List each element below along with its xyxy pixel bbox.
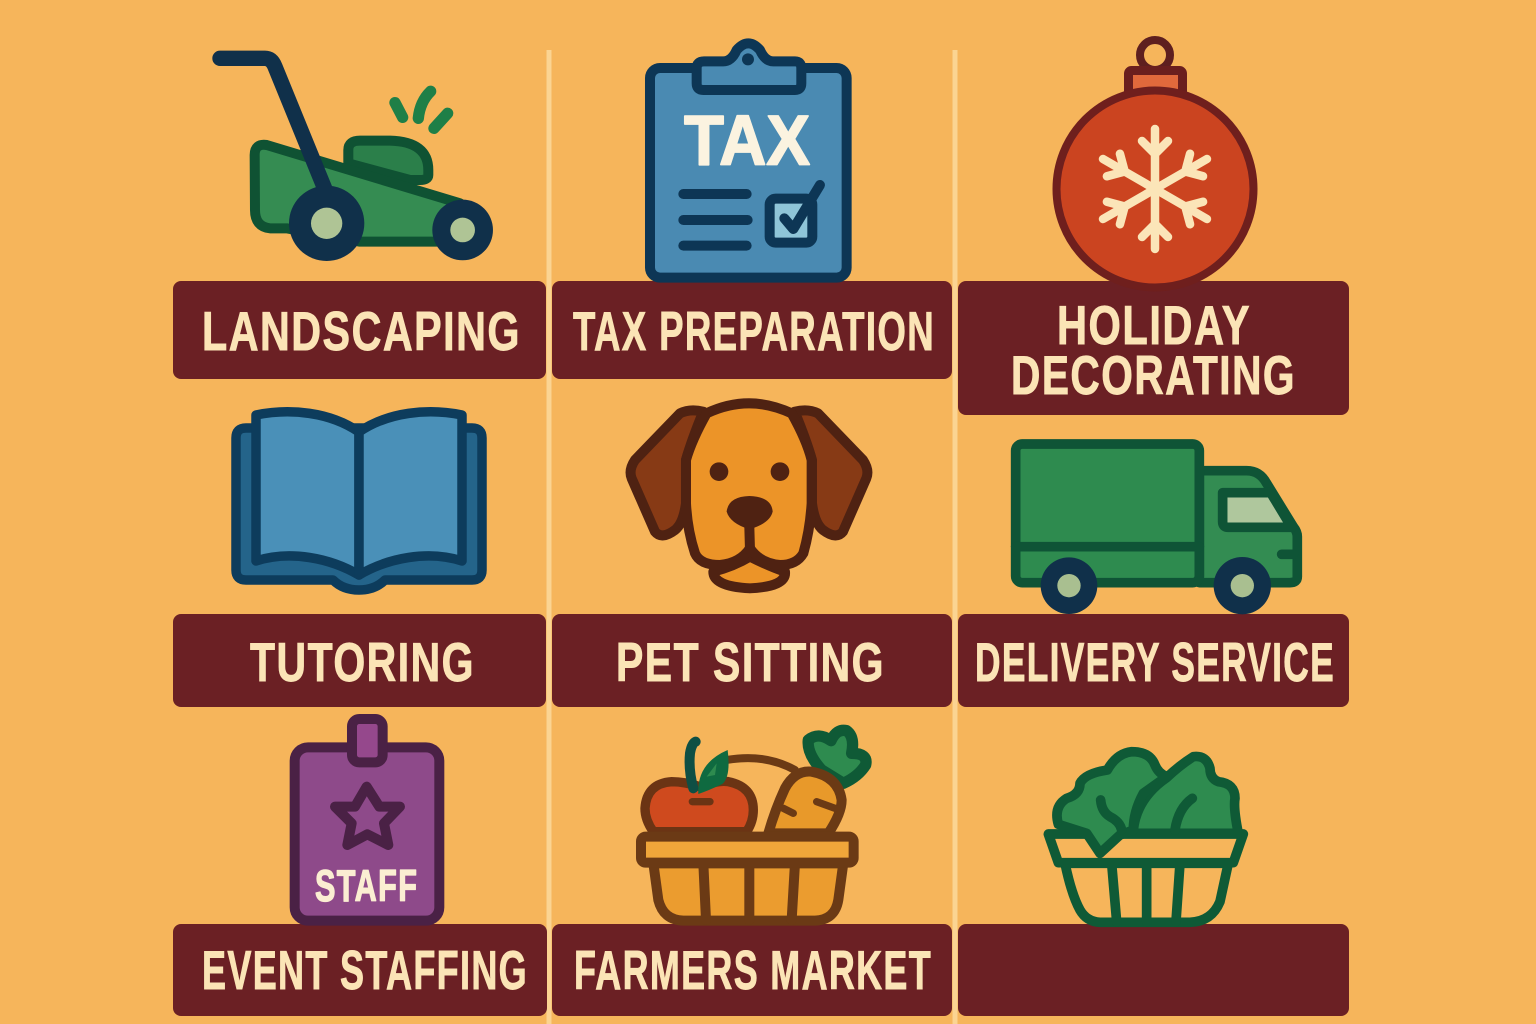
panel: event staffing	[173, 719, 547, 1016]
label bar: event staffing	[173, 924, 547, 1016]
icon: produce basket	[641, 730, 866, 921]
panel: farmers market	[552, 730, 952, 1016]
label: landscaping: LANDSCAPING	[202, 300, 521, 362]
icon: tax clipboard	[650, 43, 847, 278]
panel: pet sitting	[552, 403, 952, 707]
label bar: tax preparation	[552, 281, 952, 379]
panel: tax preparation	[552, 43, 952, 379]
icon: tax clipboard: TAX	[684, 100, 810, 179]
icon: staff badge: STAFF	[315, 862, 418, 911]
panel: holiday decorating	[958, 40, 1349, 415]
label bar: farmers market	[552, 924, 952, 1016]
icon: lawn mower	[220, 58, 493, 261]
panel: landscaping	[173, 58, 546, 379]
label bar: holiday decorating	[958, 281, 1349, 415]
label: decorating: DECORATING	[1011, 344, 1296, 406]
icon: delivery truck	[1016, 444, 1297, 614]
label bar: pet sitting	[552, 614, 952, 707]
label: pet sitting: PET SITTING	[616, 631, 885, 693]
label bar: tutoring	[173, 614, 546, 707]
label: event staffing: EVENT STAFFING	[202, 939, 528, 1001]
label: delivery service: DELIVERY SERVICE	[975, 631, 1335, 693]
panel: tutoring	[173, 412, 546, 707]
label bar: landscaping	[173, 281, 546, 379]
label: tutoring: TUTORING	[250, 631, 475, 693]
panel: unlabeled produce	[958, 752, 1349, 1016]
label: holiday: HOLIDAY	[1057, 294, 1251, 356]
icon: open book	[236, 412, 482, 590]
icon: leafy greens basket	[1048, 752, 1243, 922]
icon: staff badge	[295, 719, 439, 921]
label bar: delivery service	[958, 614, 1349, 707]
panel: delivery service	[958, 444, 1349, 707]
icon: ornament with snowflake	[1056, 40, 1254, 288]
label bar: empty	[958, 924, 1349, 1016]
label: farmers market: FARMERS MARKET	[574, 939, 932, 1001]
icon: dog face	[631, 403, 867, 588]
label: tax preparation: TAX PREPARATION	[573, 300, 935, 362]
